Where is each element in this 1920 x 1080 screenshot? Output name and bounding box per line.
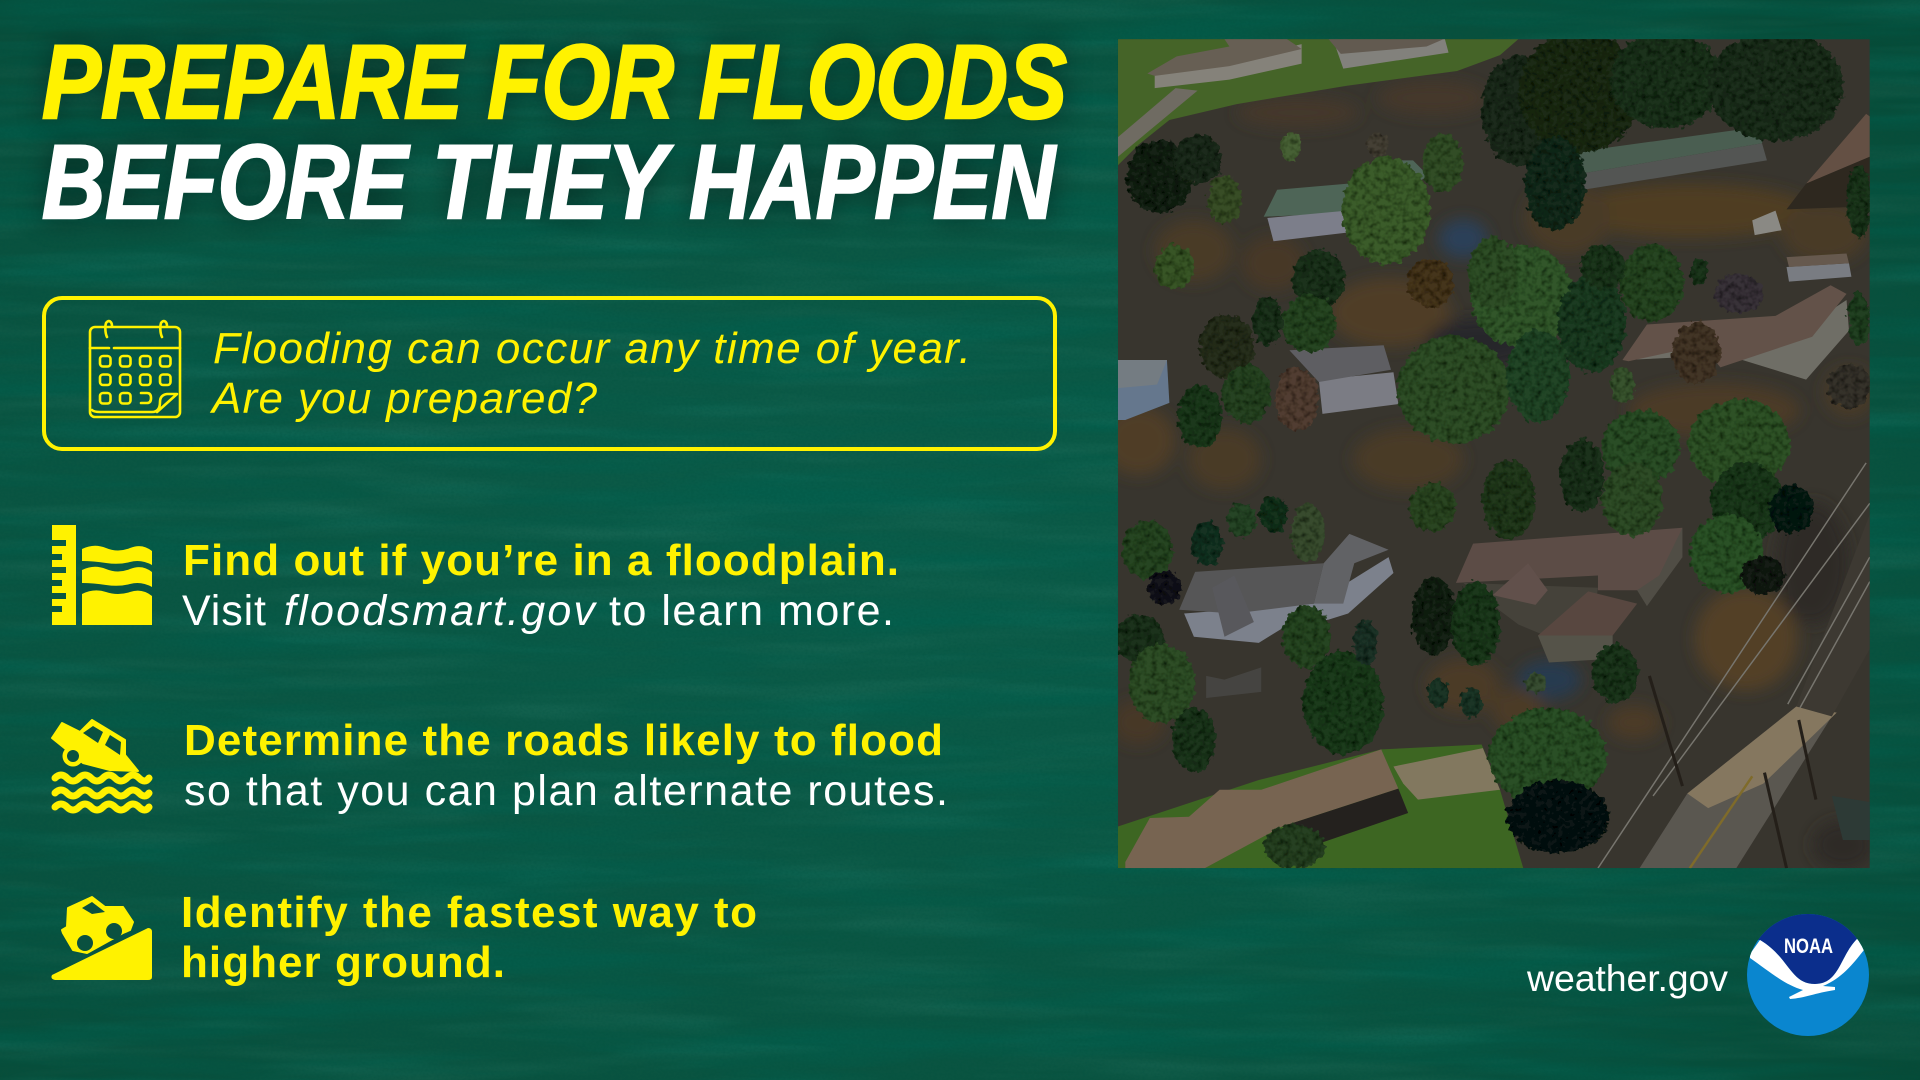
- step 3 text: [181, 888, 757, 987]
- step 1: floodplain: [52, 525, 899, 635]
- callout box: any time of year: [44, 298, 1055, 449]
- icon: calendar: [90, 321, 180, 417]
- step 3: higher ground: [51, 888, 757, 987]
- title: [42, 20, 1069, 241]
- logo: NOAA: NOAA: [1784, 935, 1833, 958]
- photo: aerial view of flooded neighbourhood: [1102, 31, 1873, 869]
- callout text: Are you prepared?: [209, 374, 598, 423]
- trees: [1116, 31, 1871, 868]
- water reflections: [1102, 81, 1873, 869]
- step 1 detail: [182, 587, 894, 635]
- title: BEFORE THEY HAPPEN: [42, 120, 1059, 241]
- title: PREPARE FOR FLOODS: [42, 20, 1069, 141]
- step 2 text: Determine the roads likely to flood: [184, 716, 943, 765]
- title line 1: PREPARE FOR FLOODS: [42, 24, 1067, 141]
- icon: car sinking in water: [52, 720, 149, 810]
- logo: NOAA: [1747, 914, 1869, 1036]
- step 2 detail: so that you can plan alternate routes.: [184, 767, 948, 815]
- driveway: top left: [1118, 88, 1198, 157]
- lawn: top: [1118, 39, 1518, 165]
- driveway: bottom: [1393, 748, 1500, 800]
- houses: [1118, 39, 1870, 868]
- step 1 detail: to learn more.: [609, 587, 894, 635]
- title line 2: BEFORE THEY HAPPEN: [42, 124, 1057, 241]
- step 1 text: Find out if you’re in a floodplain.: [183, 536, 899, 585]
- step 2: roads likely to flood: [52, 716, 948, 815]
- step 3 text: Identify the fastest way to: [181, 888, 757, 937]
- fence and small debris: [1206, 667, 1261, 698]
- step 1 detail: Visit: [182, 587, 266, 635]
- website: weather.gov: weather.gov: [1526, 957, 1728, 999]
- lawn: bottom: [1118, 744, 1523, 868]
- step 3 text: higher ground.: [181, 938, 505, 987]
- road: [1598, 463, 1870, 868]
- icon: ruler and flood water: [52, 525, 152, 625]
- callout text: Flooding can occur any time of year.: [213, 324, 971, 373]
- callout text: [209, 324, 971, 423]
- icon: car driving uphill: [51, 897, 152, 980]
- step 1 detail: floodsmart.gov: [284, 587, 598, 635]
